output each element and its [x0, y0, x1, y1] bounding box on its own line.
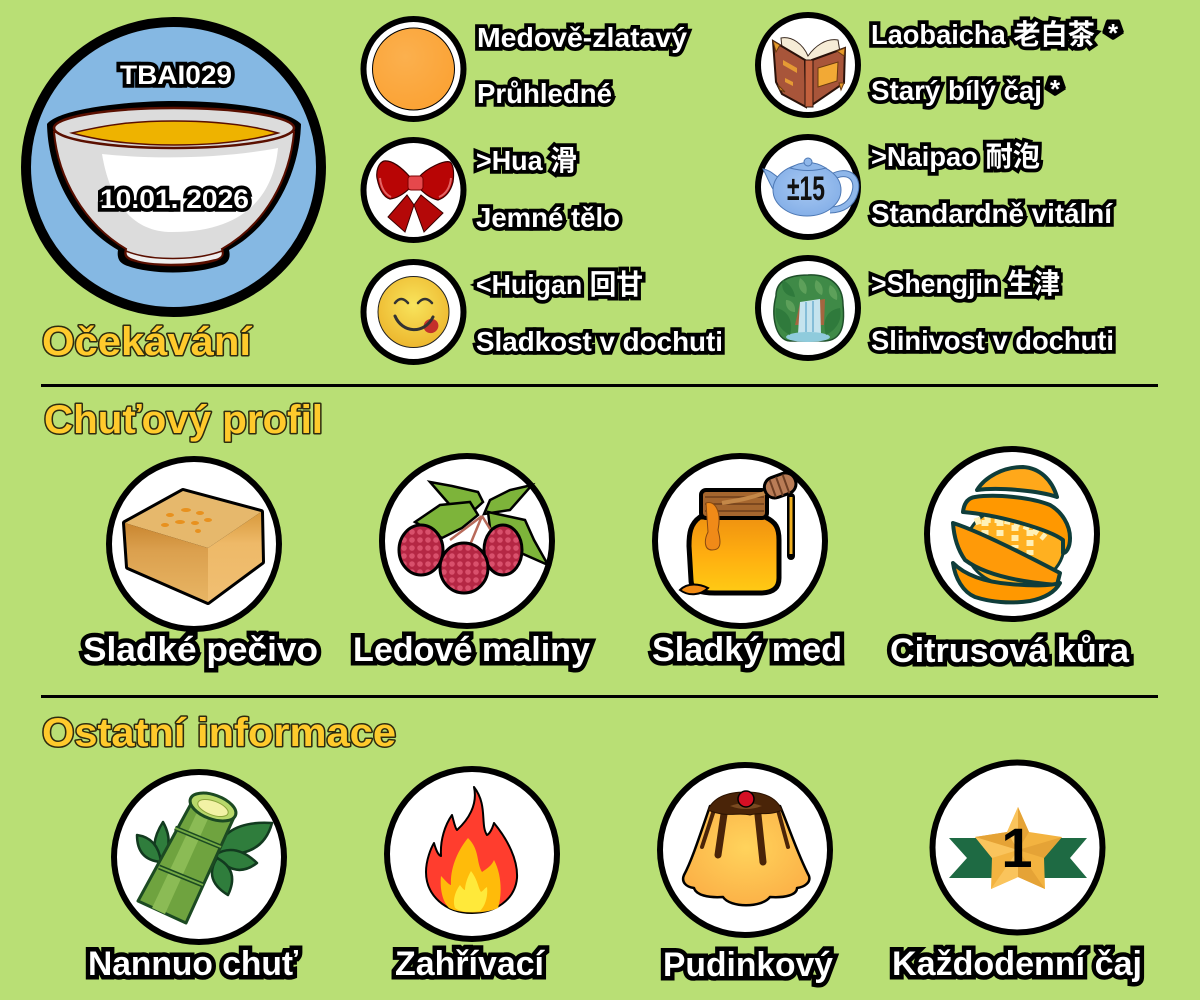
label: sweet honey: Sladký med [652, 631, 842, 669]
icon: ranked star with ribbon [932, 762, 1102, 932]
label: iced raspberries: Ledové maliny [353, 631, 590, 669]
icon: red bow [364, 140, 464, 240]
text: Laobaicha: Laobaicha 老白茶 [871, 19, 1095, 50]
panel: tea bowl badge [26, 22, 321, 312]
label: pudding-like: Pudinkový [663, 946, 833, 984]
text: Hua: >Hua 滑 [476, 145, 577, 176]
text: Shengjin: >Shengjin 生津 [871, 268, 1060, 299]
text: asterisk: * [1108, 18, 1119, 48]
label: everyday tea: Každodenní čaj [892, 945, 1142, 983]
text: colour: Medově-zlatavý [477, 22, 687, 53]
icon: raspberries [382, 456, 552, 626]
text: Naipao: >Naipao 耐泡 [871, 141, 1040, 172]
number: 1: 1 [1001, 816, 1033, 879]
text: asterisk: * [1050, 74, 1061, 104]
icon: citrus peel [927, 449, 1097, 619]
icon: flame [387, 769, 557, 939]
code label: TBAI029 [120, 60, 232, 90]
icon: bamboo [114, 772, 284, 942]
label: citrus peel: Citrusová kůra [890, 632, 1130, 670]
text: vitality: Standardně vitální [871, 198, 1113, 229]
text: old white tea: Starý bílý čaj [871, 75, 1042, 106]
label: sweet pastry: Sladké pečivo [83, 631, 318, 669]
date label: 10.01. 2026 [100, 184, 249, 214]
text: aftertaste salivation: Slinivost v dochuti [871, 325, 1114, 356]
number: plus minus 15: ±15 [787, 170, 825, 208]
divider line [41, 695, 1158, 698]
icon: smiling face [364, 262, 464, 362]
icon: tea bowl [47, 101, 301, 272]
text: Huigan: <Huigan 回甘 [476, 269, 643, 300]
heading: Ostatní informace: Ostatní informace [42, 711, 396, 755]
icon: pudding [660, 765, 830, 935]
icon: jungle waterfall [758, 258, 858, 358]
text: aftertaste sweetness: Sladkost v dochuti [476, 326, 723, 357]
icon: open book [758, 15, 858, 115]
icon: teapot with 15 [758, 137, 858, 237]
icon: sweet sponge cake [109, 459, 279, 629]
heading: Očekávání: Očekávání [42, 320, 253, 364]
heading: Chuťový profil: Chuťový profil [44, 398, 323, 442]
label: nannuo taste: Nannuo chuť [88, 945, 299, 983]
icon: honey jar [655, 456, 825, 626]
icon: honey-gold colour swatch [364, 19, 464, 119]
divider line [41, 384, 1158, 387]
text: clarity: Průhledné [477, 78, 612, 109]
label: warming: Zahřívací [395, 945, 546, 983]
text: body: Jemné tělo [476, 202, 620, 233]
